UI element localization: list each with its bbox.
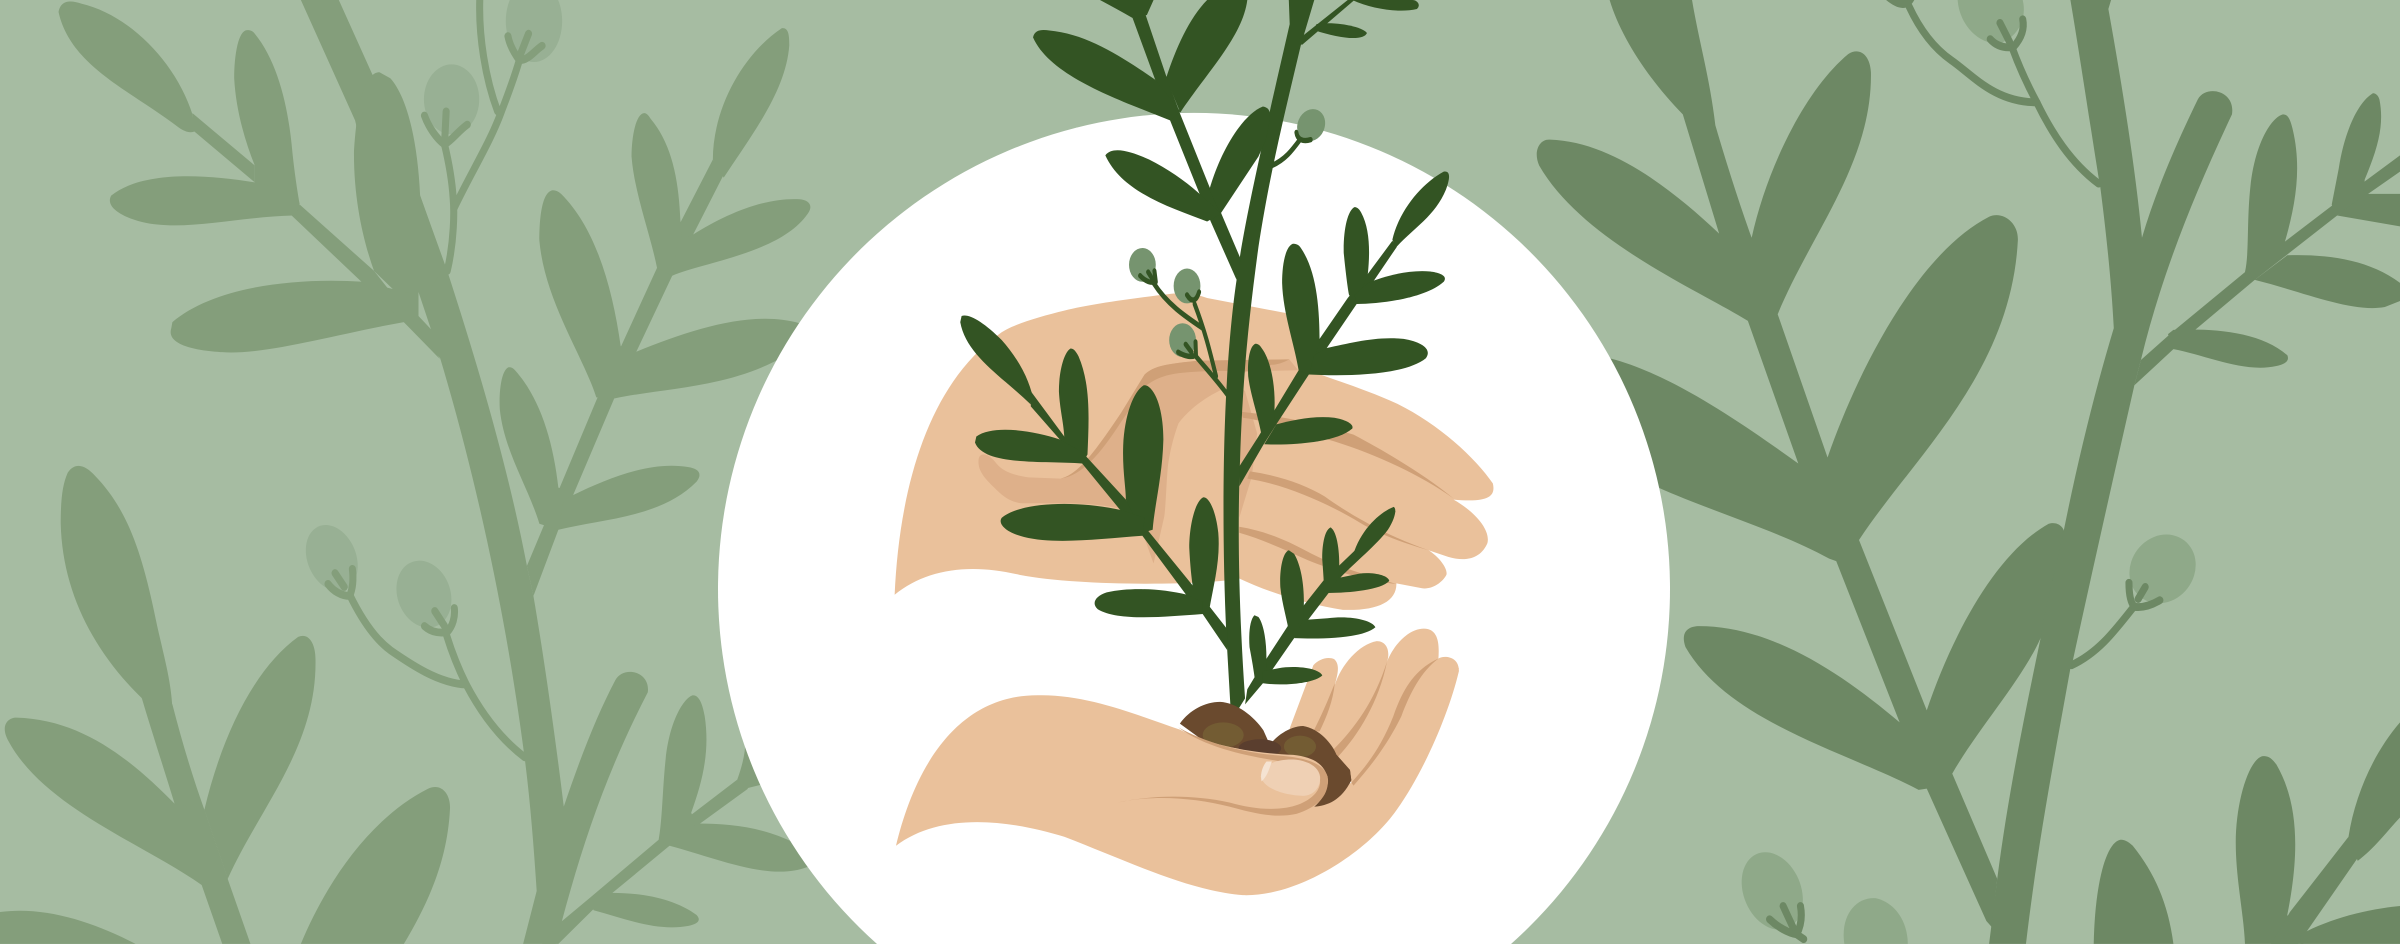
main stem: right foliage (1989, 0, 2232, 944)
panel: left background foliage (0, 0, 813, 944)
upper branches and leaves: left foliage (59, 2, 445, 359)
bottom leaves: right foliage (1886, 0, 2400, 944)
thin bud stems: left foliage (328, 0, 542, 757)
icon: seedling upper left branch (1033, 0, 1270, 280)
icon: lower hand palm and thumb (896, 657, 1459, 895)
icon: seedling right upper branch (1239, 171, 1449, 486)
right branch and leaves: left foliage (500, 28, 813, 596)
thin bud stems: right foliage (1770, 6, 2160, 939)
main stem: left foliage (301, 0, 648, 944)
thin bud stems: seedling (1140, 132, 1311, 394)
lower left branch and leaves: left foliage (0, 466, 450, 944)
icon: lower hand fingers (1290, 629, 1459, 783)
panel: central hands and seedling (895, 0, 1493, 895)
white circle (718, 113, 1670, 944)
side branch and leaves: right foliage (2134, 93, 2400, 385)
icon: upper hand (895, 293, 1493, 610)
lower right branch and leaves: left foliage (542, 695, 808, 944)
large branch with leaves: right foliage (1537, 0, 2073, 927)
buds: seedling (1129, 104, 1329, 357)
buds: left foliage (295, 0, 562, 639)
panel: right background foliage (1537, 0, 2400, 944)
icon: soil (1180, 702, 1351, 806)
icon: seedling left middle branch (960, 315, 1227, 650)
buds: right foliage (1729, 0, 2207, 944)
icon: seedling top right sprig (1289, 0, 1419, 45)
icon: seedling lower right branch (1245, 507, 1396, 704)
icon: main seedling stem (1224, 0, 1314, 709)
